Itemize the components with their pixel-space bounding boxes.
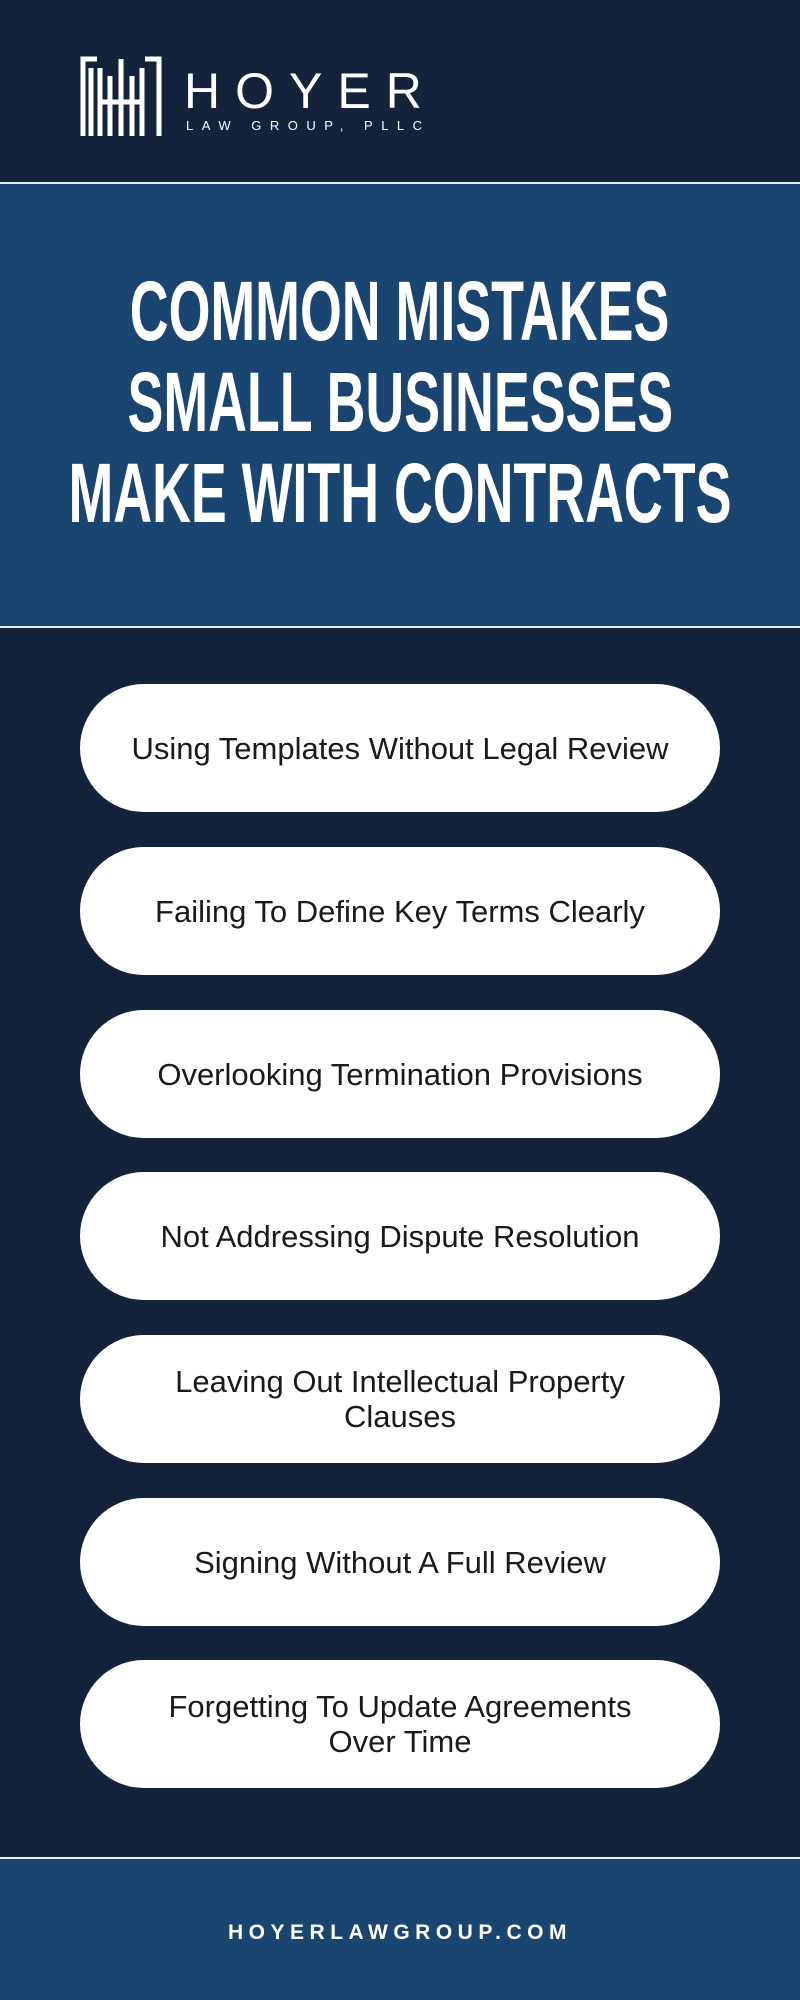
footer — [0, 1857, 800, 2000]
pill 4: Not Addressing Dispute Resolution — [160, 1218, 640, 1254]
pill 6: Signing Without A Full Review — [194, 1544, 606, 1580]
list of mistakes — [80, 684, 720, 1788]
pill 5: Leaving Out Intellectual Property Clauses — [175, 1364, 625, 1434]
pill 7: Over Time — [329, 1724, 471, 1759]
pill 4 — [80, 1172, 720, 1300]
pill 1 — [80, 684, 720, 812]
brand subtitle: LAW GROUP, PLLC — [186, 118, 431, 133]
pill 7 — [80, 1660, 720, 1788]
header — [0, 0, 800, 182]
pill 3: Overlooking Termination Provisions — [157, 1056, 643, 1092]
website: HOYERLAWGROUP.COM — [228, 1921, 572, 1944]
title — [69, 264, 731, 540]
pill 3 — [80, 1010, 720, 1138]
brand name: HOYER — [184, 63, 437, 119]
title: MAKE WITH CONTRACTS — [69, 446, 731, 540]
pill 6 — [80, 1498, 720, 1626]
title: SMALL BUSINESSES — [127, 355, 673, 449]
pill 5 — [80, 1335, 720, 1463]
logo — [80, 56, 437, 136]
title band — [0, 182, 800, 628]
title: COMMON MISTAKES — [130, 264, 670, 358]
icon: logo mark — [80, 56, 162, 136]
pill 2: Failing To Define Key Terms Clearly — [155, 894, 645, 928]
pill 7: Forgetting To Update Agreements — [168, 1689, 632, 1724]
pill 2 — [80, 847, 720, 975]
pill 1: Using Templates Without Legal Review — [131, 730, 669, 766]
